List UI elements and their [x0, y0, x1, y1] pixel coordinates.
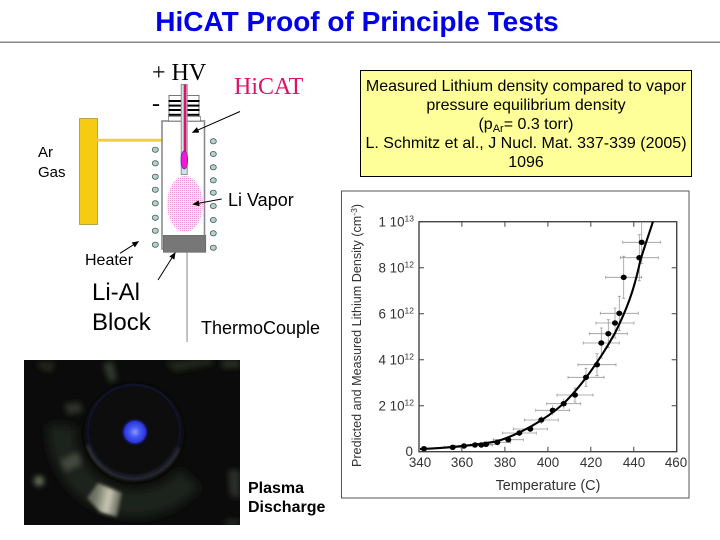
photo: plasma discharge	[24, 358, 240, 525]
y-axis tick labels: 12	[405, 352, 414, 362]
y-axis tick labels	[378, 214, 414, 459]
icon: plasma in tube	[181, 151, 188, 169]
title rule	[0, 42, 720, 43]
dim metal patches	[34, 358, 240, 525]
label: + HV: + HV	[152, 60, 207, 86]
lithium-aluminium block	[163, 235, 206, 252]
data points	[421, 240, 645, 451]
error bars	[445, 222, 661, 449]
y-axis tick labels: 4 10	[378, 352, 405, 368]
argon gas feed line	[97, 139, 163, 142]
label: Ar Gas: Ar	[38, 144, 53, 161]
panel: density vs temperature chart	[342, 191, 689, 498]
vacuum chamber	[162, 121, 204, 249]
y-axis tick labels: 12	[405, 306, 414, 316]
x-axis tick labels: 380	[494, 455, 516, 470]
diagram: HiCAT apparatus	[80, 84, 240, 342]
x-axis tick labels: 340	[409, 455, 431, 470]
y-axis tick labels: 12	[405, 260, 414, 270]
y-axis tick labels: 8 10	[378, 260, 405, 276]
title: HiCAT Proof of Principle Tests	[155, 6, 559, 37]
lower aperture rim	[88, 445, 178, 478]
plot frame and ticks	[419, 222, 677, 452]
callout: measured lithium density note: pressure equilibrium density	[426, 97, 626, 114]
y-axis tick labels: 12	[405, 398, 414, 408]
caption: Plasma Discharge: Discharge	[248, 499, 325, 516]
label: Ar Gas: Gas	[38, 164, 66, 181]
x-axis tick labels	[409, 455, 687, 470]
thermocouple wire	[186, 243, 188, 342]
y-axis tick labels: 1 10	[378, 214, 405, 230]
callout: measured lithium density note: L. Schmitz et al., J Nucl. Mat. 337-339 (2005)	[365, 135, 687, 152]
y-axis title: Predicted and Measured Lithium Density (cm	[350, 216, 364, 467]
callout: measured lithium density note	[360, 70, 692, 176]
callout: measured lithium density note: 1096	[508, 154, 544, 171]
outer dim housing	[62, 425, 190, 503]
icon: lithium vapor cloud	[167, 176, 203, 232]
y-axis tick labels: 13	[405, 214, 414, 224]
label: minus: -	[152, 91, 160, 117]
label: Li-Al Block: Block	[92, 309, 152, 336]
inner dark aperture	[84, 383, 184, 483]
caption: Plasma Discharge: Plasma	[248, 480, 304, 497]
callout: measured lithium density note: Measured Lithium density compared to vapor	[366, 78, 687, 95]
electrode connector	[168, 96, 200, 121]
y-axis title: )	[350, 204, 364, 208]
callout: measured lithium density note: (p	[478, 116, 574, 135]
callout: measured lithium density note: Ar	[493, 123, 504, 135]
icon: argon gas bottle	[80, 118, 98, 224]
x-axis title: Temperature (C)	[496, 478, 600, 494]
y-axis tick labels: 6 10	[378, 306, 405, 322]
label: Heater: Heater	[85, 252, 134, 269]
faint blue ring	[88, 385, 180, 477]
blue plasma glow	[121, 418, 149, 446]
y-axis tick labels: 2 10	[378, 398, 405, 414]
HiCAT tube	[181, 84, 187, 174]
label: Li-Al Block: Li-Al	[92, 279, 140, 306]
central electrode	[184, 84, 186, 152]
heater coils left	[152, 147, 158, 247]
label: Li Vapor: Li Vapor	[228, 190, 294, 210]
x-axis tick labels: 360	[451, 455, 473, 470]
callout: measured lithium density note: = 0.3 torr)	[504, 116, 574, 133]
arrow: HiCAT	[193, 112, 240, 132]
x-axis tick labels: 420	[580, 455, 602, 470]
heater coils right	[210, 139, 216, 250]
arrow: Li vapor	[193, 199, 222, 204]
arrow: heater	[120, 242, 138, 253]
label: ThermoCouple: ThermoCouple	[201, 318, 320, 338]
y-axis title: -3	[349, 208, 359, 216]
x-axis tick labels: 440	[623, 455, 645, 470]
predicted density curve	[420, 218, 654, 449]
y-axis tick labels: 0	[406, 444, 413, 459]
arrow: Li-Al block	[158, 253, 175, 280]
x-axis tick labels: 400	[537, 455, 559, 470]
x-axis tick labels: 460	[665, 455, 687, 470]
label: HiCAT: HiCAT	[234, 74, 304, 100]
bright metal patch	[87, 483, 122, 517]
